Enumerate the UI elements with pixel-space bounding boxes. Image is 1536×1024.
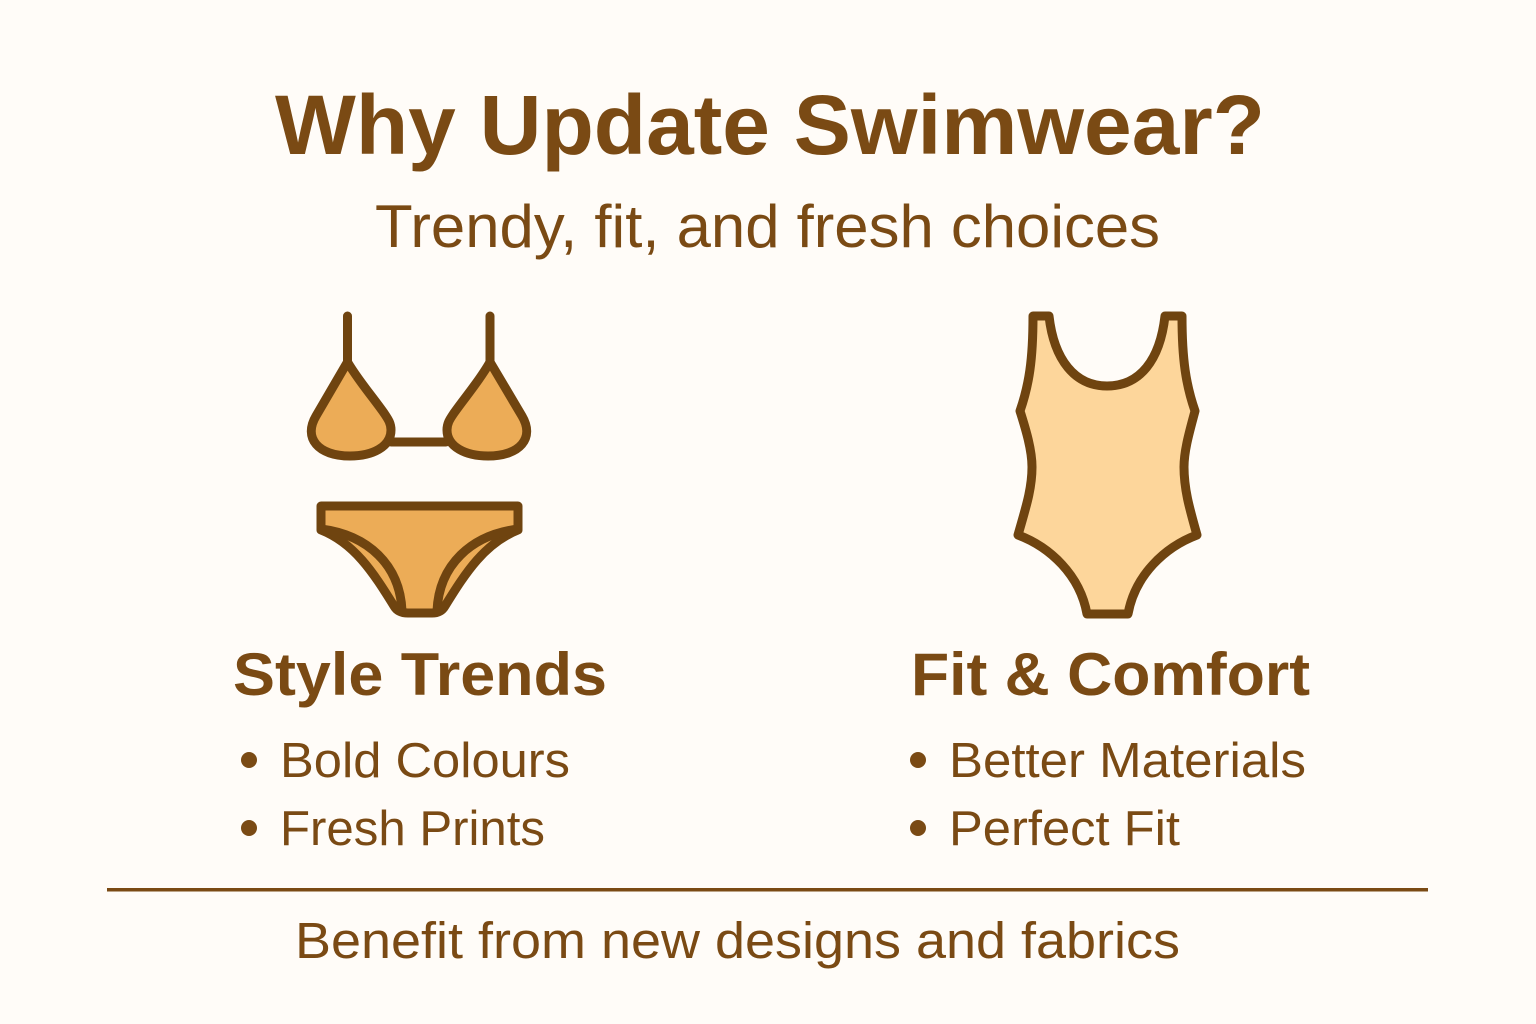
title: Why Update Swimwear? bbox=[275, 78, 1265, 172]
list: fit and comfort bbox=[910, 734, 1306, 856]
list: style trends: Bold Colours bbox=[280, 734, 570, 788]
footer text: Benefit from new designs and fabrics bbox=[295, 912, 1180, 969]
list: fit and comfort: Better Materials bbox=[949, 734, 1306, 788]
panel: style trends bbox=[233, 316, 607, 856]
list: fit and comfort: Perfect Fit bbox=[949, 802, 1180, 856]
icon: bikini bbox=[311, 316, 527, 613]
panel: fit and comfort bbox=[910, 316, 1310, 856]
heading: fit and comfort: Fit & Comfort bbox=[911, 641, 1310, 708]
subtitle: Trendy, fit, and fresh choices bbox=[375, 193, 1160, 260]
list: style trends: Fresh Prints bbox=[280, 802, 545, 856]
icon: one-piece swimsuit bbox=[1018, 316, 1197, 614]
list: style trends bbox=[241, 734, 570, 856]
heading: style trends: Style Trends bbox=[233, 641, 607, 708]
